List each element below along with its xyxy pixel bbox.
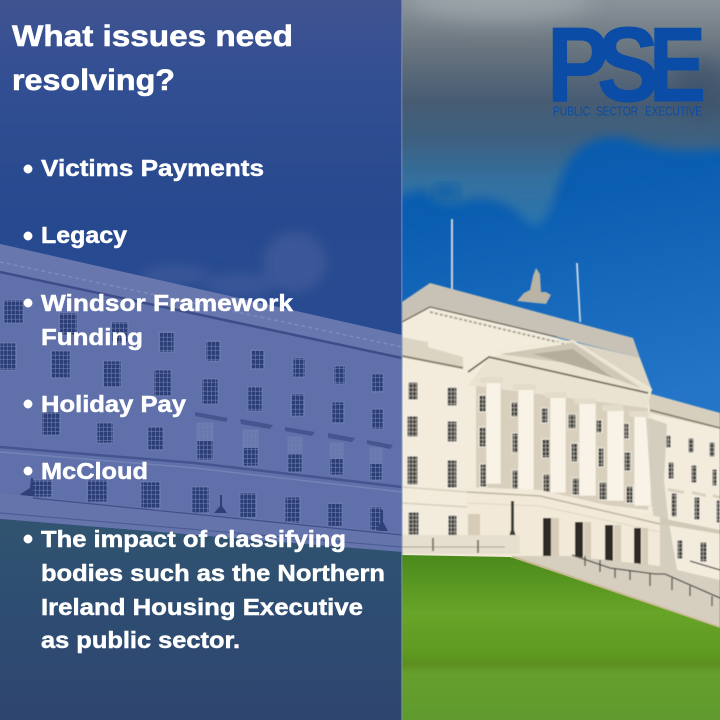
item: classifying bodies: The impact of classifying: [41, 526, 346, 552]
pediment: [500, 343, 641, 388]
string course: [0, 447, 402, 487]
left wing cornice: [0, 244, 402, 358]
panel edge line: [401, 0, 402, 720]
item: classifying bodies: bodies such as the Northern: [41, 560, 385, 586]
left wing wall: [0, 244, 402, 535]
item: Windsor Framework Funding: [24, 290, 294, 350]
portico recess: [476, 385, 648, 510]
logo letters: E: [649, 6, 706, 124]
statue: [517, 268, 551, 304]
logo: PSE: [547, 6, 706, 124]
bullet list: [24, 155, 385, 653]
item: classifying bodies: [24, 526, 385, 653]
flagpoles: [451, 219, 581, 322]
item: Windsor Framework Funding: Windsor Framework: [41, 290, 294, 316]
entrance doors: [543, 518, 641, 566]
wing shadow: [646, 417, 677, 570]
logo tagline: [553, 104, 702, 118]
balustrade: [402, 535, 520, 554]
item: Holiday Pay: Holiday Pay: [41, 391, 186, 417]
door recess shading: [468, 514, 648, 566]
logo tagline: EXECUTIVE: [645, 104, 702, 118]
cloud: [140, 232, 327, 297]
lamps: [17, 478, 388, 531]
logo tagline: PUBLIC: [553, 104, 590, 118]
blue gap between clouds: [432, 183, 460, 201]
tall window upper sashes: [197, 423, 382, 464]
windows: [407, 382, 720, 562]
item: McCloud: McCloud: [41, 458, 148, 484]
balustrade: [0, 493, 402, 552]
portico columns: [486, 381, 651, 506]
left wall cornice: [402, 337, 463, 367]
lamp: [507, 501, 518, 543]
entablature: [468, 343, 652, 408]
item: Legacy: Legacy: [41, 222, 127, 248]
photo: grass lawn: [402, 555, 720, 720]
left wall lower lines: [402, 487, 467, 507]
logo tagline: SECTOR: [596, 104, 638, 118]
upper attic shade: [557, 338, 652, 390]
logo letters: [547, 6, 706, 124]
wing pediments: [668, 488, 720, 499]
left wing windows: [0, 300, 383, 530]
pediments: [195, 412, 393, 449]
wing lower cornice: [660, 518, 720, 534]
title: What issues need: [12, 20, 293, 53]
panel: blue overlay with building: [0, 0, 402, 720]
main wall: [402, 307, 720, 600]
item: Windsor Framework Funding: Funding: [41, 324, 143, 350]
title: resolving?: [12, 64, 175, 97]
title: [12, 20, 293, 97]
column capitals: [480, 377, 649, 417]
lawn under overlay: [0, 519, 402, 720]
photo: Stormont parliament building: [402, 219, 720, 628]
item: classifying bodies: as public sector.: [41, 627, 240, 653]
portico base: [467, 487, 660, 570]
roof block: [402, 283, 640, 358]
logo letters: P: [547, 6, 609, 124]
logo letters: S: [597, 6, 659, 124]
stair railings: [572, 555, 720, 606]
item: classifying bodies: Ireland Housing Executive: [41, 594, 363, 620]
item: Victims Payments: Victims Payments: [41, 155, 264, 181]
steps: [512, 556, 720, 627]
photo: sky: [360, 0, 720, 440]
right wing cornice: [648, 393, 720, 429]
